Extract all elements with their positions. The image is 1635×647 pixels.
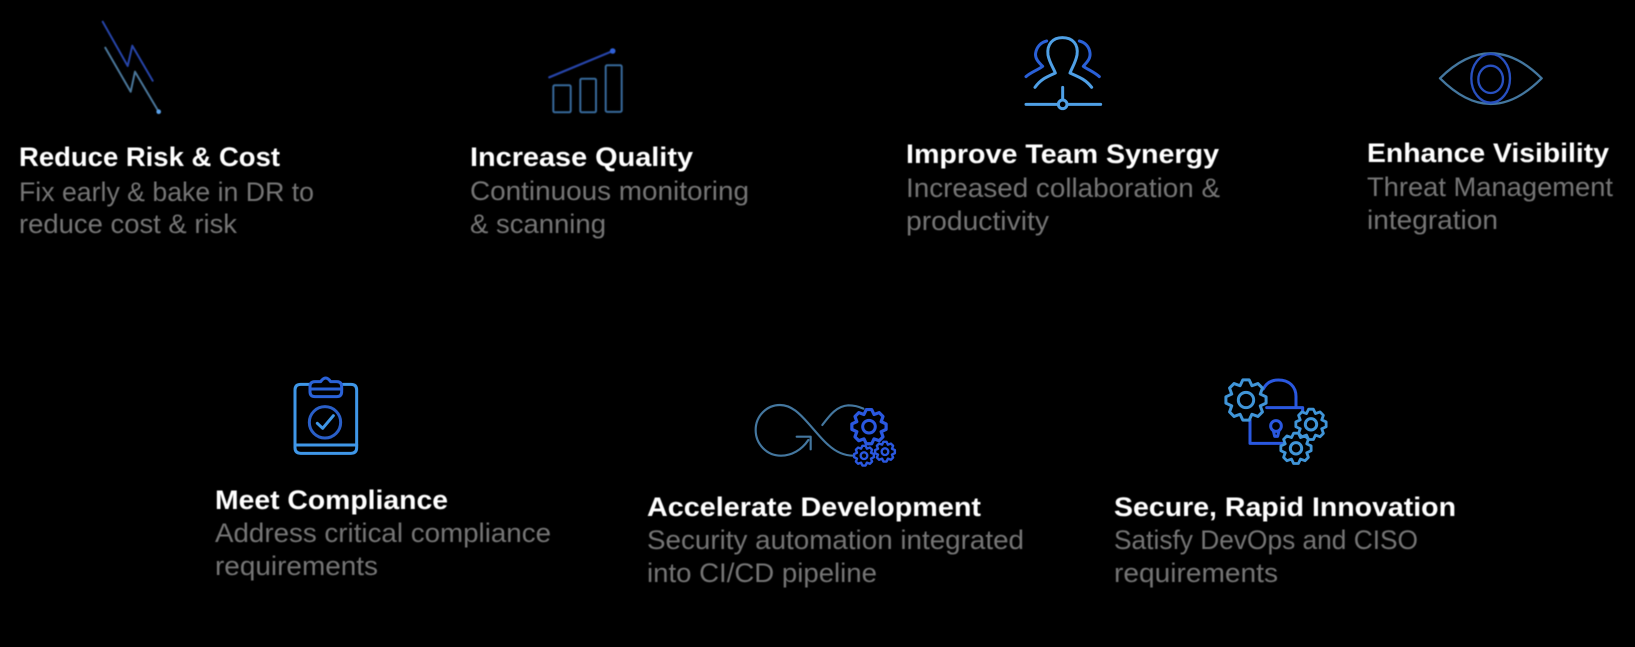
panel: meet compliance (215, 378, 551, 581)
panel: improve team synergy (906, 38, 1220, 236)
heading and description: reduce risk (19, 142, 314, 239)
heading and description: compliance: Meet Compliance (215, 485, 448, 515)
heading and description: development: Security automation integrated (647, 525, 1024, 555)
icon: infinity loop with gears (756, 405, 895, 466)
heading and description: development (647, 492, 1024, 588)
heading and description: innovation: Secure, Rapid Innovation (1114, 492, 1456, 522)
icon: rising bar chart (549, 48, 622, 112)
icon: eye (1440, 53, 1542, 104)
heading and description: development: Accelerate Development (647, 492, 981, 522)
heading and description: reduce risk: reduce cost & risk (19, 209, 238, 239)
icon: team of people on a network node (1026, 38, 1101, 109)
panel: increase quality (470, 48, 749, 239)
heading and description: innovation: requirements (1114, 558, 1278, 588)
heading and description: increase quality: Continuous monitoring (470, 176, 749, 206)
heading and description: innovation (1114, 492, 1456, 588)
heading and description: reduce risk: Reduce Risk & Cost (19, 142, 280, 172)
icon: clipboard with check mark (295, 378, 357, 453)
heading and description: compliance (215, 485, 551, 581)
panel: accelerate development (647, 405, 1024, 588)
heading and description: compliance: Address critical compliance (215, 518, 551, 548)
heading and description: innovation: Satisfy DevOps and CISO (1114, 525, 1418, 555)
heading and description: compliance: requirements (215, 551, 378, 581)
heading and description: development: into CI/CD pipeline (647, 558, 877, 588)
panel: reduce risk and cost (19, 22, 314, 239)
heading and description: increase quality: & scanning (470, 209, 606, 239)
heading and description: team synergy: productivity (906, 206, 1050, 236)
heading and description: team synergy: Improve Team Synergy (906, 139, 1219, 169)
heading and description: reduce risk: Fix early & bake in DR to (19, 177, 314, 207)
panel: enhance visibility (1367, 53, 1614, 235)
heading and description: increase quality (470, 142, 749, 239)
icon: lightning bolt (103, 22, 161, 114)
icon: padlock with gears (1226, 380, 1326, 463)
heading and description: visibility: Enhance Visibility (1367, 138, 1609, 168)
heading and description: visibility (1367, 138, 1614, 235)
heading and description: team synergy: Increased collaboration & (906, 173, 1220, 203)
heading and description: team synergy (906, 139, 1220, 236)
heading and description: visibility: integration (1367, 205, 1498, 235)
heading and description: visibility: Threat Management (1367, 172, 1614, 202)
panel: secure rapid innovation (1114, 380, 1456, 588)
heading and description: increase quality: Increase Quality (470, 142, 693, 172)
